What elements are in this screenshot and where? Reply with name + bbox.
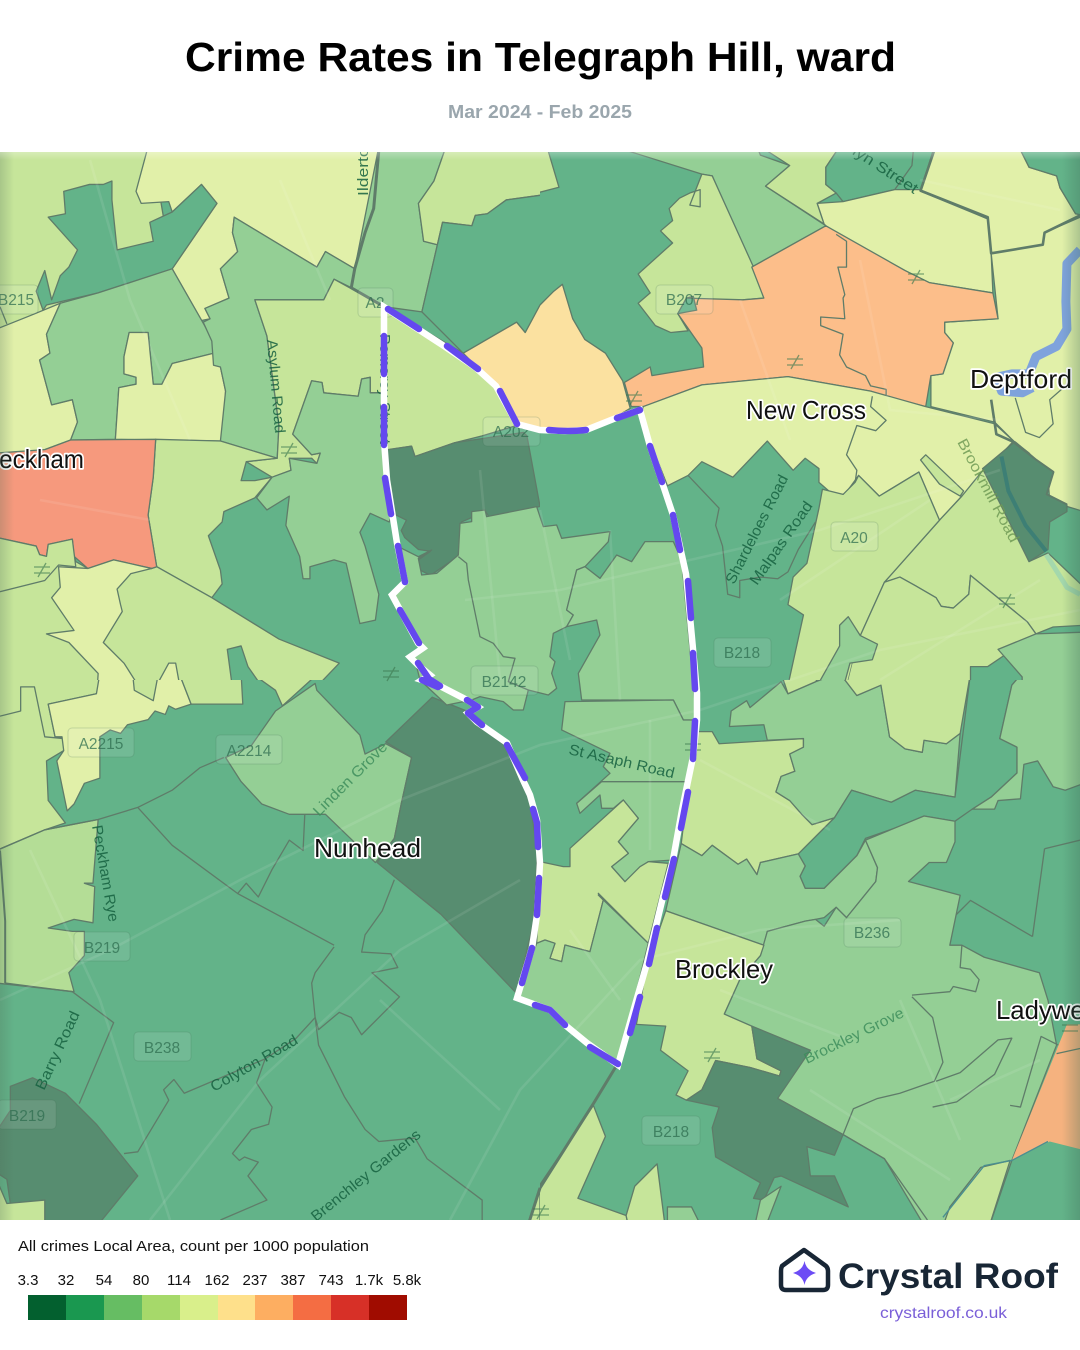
icon: house with star <box>781 1250 828 1290</box>
place names: New Cross <box>746 395 866 425</box>
ward boundary: Telegraph Hill <box>384 307 697 1065</box>
map areas: south-east <box>526 673 1080 1231</box>
legend title: All crimes Local Area, count per 1000 population <box>18 1238 369 1255</box>
legend values: 80 <box>133 1272 149 1289</box>
road labels: Malpas Road <box>746 498 816 588</box>
place names: Deptford <box>970 364 1072 394</box>
road number plates: A2214 <box>227 743 272 760</box>
road number plates: B219 <box>84 940 120 957</box>
legend values: 54 <box>96 1272 112 1289</box>
road number plates: A20 <box>840 530 868 547</box>
logo: Crystal Roof <box>781 1250 1058 1322</box>
map areas: north-west <box>0 152 540 680</box>
map areas: north-east <box>540 152 1080 680</box>
legend values <box>18 1272 422 1289</box>
road number plates: B207 <box>666 292 702 309</box>
legend values: 162 <box>204 1272 230 1289</box>
road labels: Brookmill Road <box>953 436 1022 545</box>
legend <box>18 1238 422 1320</box>
legend values: 5.8k <box>393 1272 422 1289</box>
road labels: Pomeroy Street <box>376 334 393 445</box>
road labels: Brenchley Gardens <box>308 1126 424 1225</box>
road number plates: A202 <box>493 424 529 441</box>
road labels: Ilderton Road <box>355 91 372 196</box>
road labels <box>32 91 1022 1225</box>
legend values: 1.7k <box>355 1272 384 1289</box>
road labels: Linden Grove <box>310 739 391 820</box>
logo url: crystalroof.co.uk <box>880 1305 1008 1322</box>
road labels: Asylum Road <box>263 339 288 434</box>
street network <box>0 160 1080 1220</box>
road labels: St Asaph Road <box>567 741 676 782</box>
title: Crime Rates in Telegraph Hill, ward <box>185 34 896 80</box>
subtitle: date range: Mar 2024 - Feb 2025 <box>448 102 632 122</box>
map areas: inside the ward, south <box>517 782 690 1065</box>
map areas: inside the ward, north <box>393 507 697 810</box>
map edge shading <box>0 152 1080 1220</box>
legend values: 114 <box>167 1272 191 1289</box>
road number plates: B238 <box>144 1040 180 1057</box>
railway station icons <box>34 270 1078 1219</box>
road number plates: B218 <box>724 645 760 662</box>
legend values: 237 <box>242 1272 268 1289</box>
legend colour scale <box>28 1295 407 1320</box>
place names: Brockley <box>675 954 773 984</box>
legend values: 32 <box>58 1272 74 1289</box>
place names: Nunhead <box>314 833 421 863</box>
road labels: Barry Road <box>32 1008 84 1093</box>
road number plates: B236 <box>854 925 890 942</box>
road labels: Colyton Road <box>208 1032 301 1095</box>
road number plates: B219 <box>9 1108 45 1125</box>
road labels: Shardeloes Road <box>722 472 792 587</box>
road number plates: A2215 <box>79 736 123 753</box>
road number plates <box>0 285 901 1145</box>
road number plates: A2 <box>366 295 384 312</box>
road labels: Evelyn Street <box>824 126 922 198</box>
road labels: Brockley Grove <box>801 1005 907 1068</box>
logo wordmark: Crystal Roof <box>838 1257 1058 1296</box>
road number plates: B2142 <box>482 674 526 691</box>
legend values: 743 <box>318 1272 344 1289</box>
road number plates: B218 <box>653 1124 689 1141</box>
map areas: south-west <box>0 673 540 1231</box>
road labels: Peckham Rye <box>88 824 122 923</box>
legend values: 3.3 <box>18 1272 38 1289</box>
river: Deptford Creek <box>996 250 1080 393</box>
legend values: 387 <box>280 1272 306 1289</box>
place names <box>0 364 1080 1025</box>
